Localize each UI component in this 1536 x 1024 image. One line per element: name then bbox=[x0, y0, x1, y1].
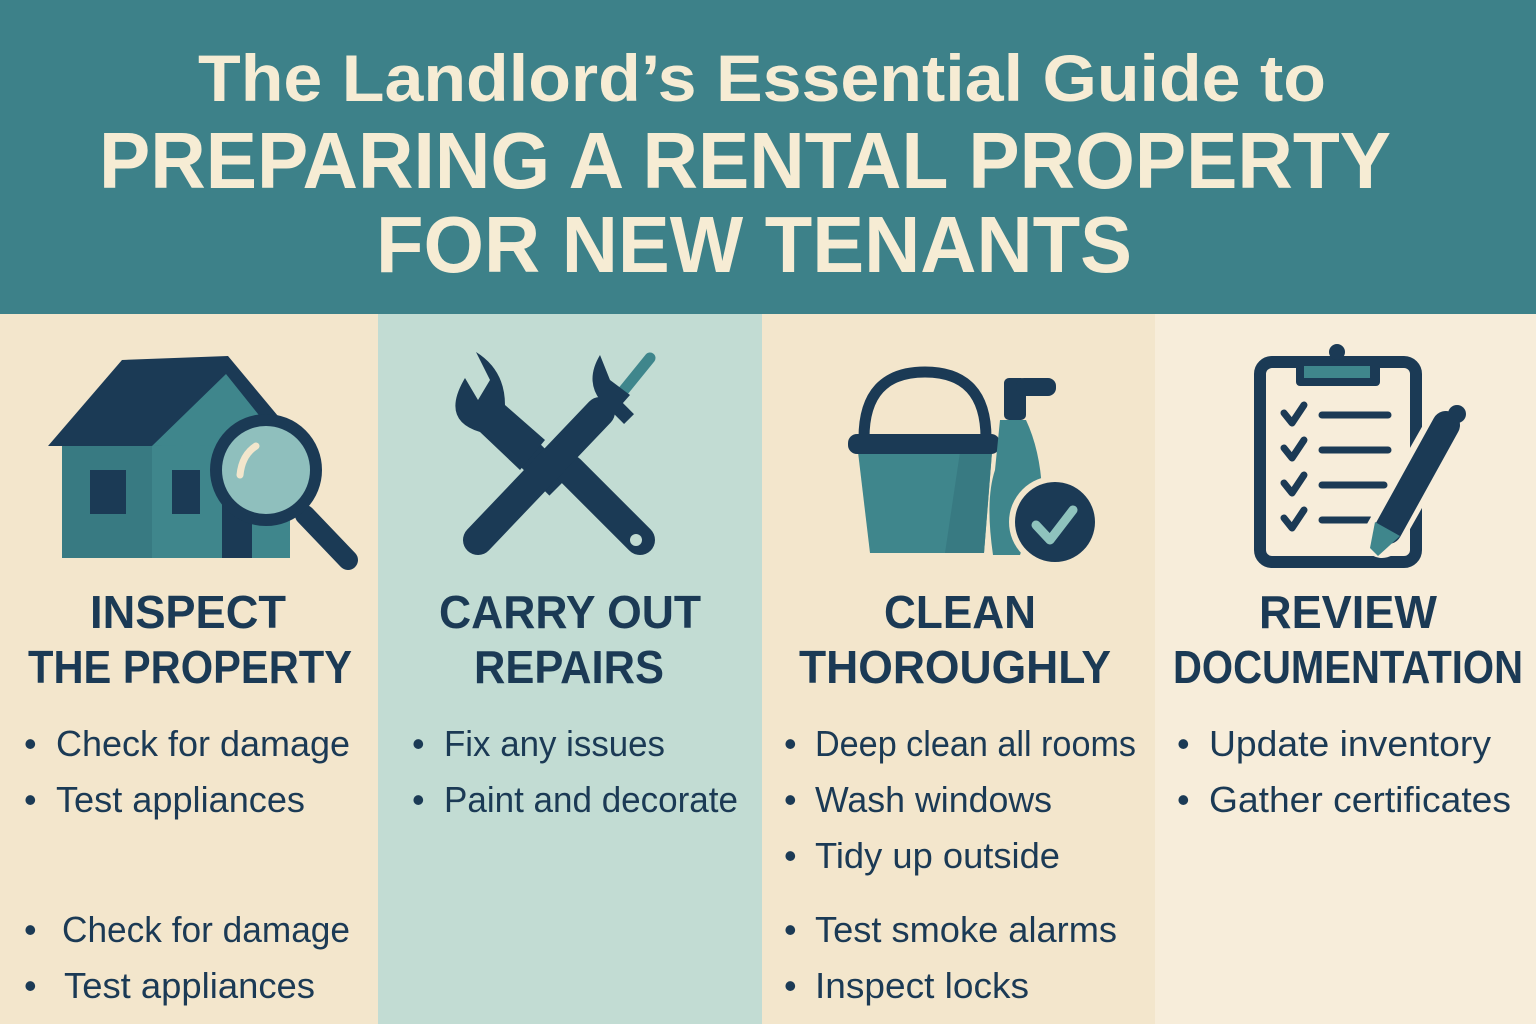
panel: inspect bbox=[0, 314, 378, 1024]
icon: clipboard and pen bbox=[1260, 344, 1466, 562]
bullets: clean: Wash windows bbox=[815, 779, 1052, 820]
heading: documentation: REVIEW bbox=[1259, 586, 1438, 638]
bullets: inspect: Check for damage bbox=[56, 723, 350, 764]
bullets: repairs: • bbox=[412, 779, 425, 820]
bullets: clean: • bbox=[784, 909, 797, 950]
heading: repairs: REPAIRS bbox=[474, 641, 664, 693]
bullets: clean: Tidy up outside bbox=[815, 835, 1060, 876]
icon: bucket and spray bottle bbox=[848, 372, 1101, 568]
title: FOR NEW TENANTS bbox=[376, 200, 1132, 289]
bullets: clean: • bbox=[784, 835, 797, 876]
heading: inspect: INSPECT bbox=[90, 586, 286, 638]
bullets: inspect: Test appliances bbox=[64, 965, 315, 1006]
panel: documentation bbox=[1155, 314, 1536, 1024]
bullets: clean: • bbox=[784, 723, 797, 764]
bullets: inspect: • bbox=[24, 909, 37, 950]
bullets: inspect: • bbox=[24, 965, 37, 1006]
bullets: clean bbox=[784, 723, 1136, 1006]
bullets: documentation: • bbox=[1177, 723, 1190, 764]
icon: wrench and screwdriver bbox=[455, 352, 650, 546]
bullets: documentation: • bbox=[1177, 779, 1190, 820]
heading: repairs: CARRY OUT bbox=[439, 586, 701, 638]
bullets: inspect: Check for damage bbox=[62, 909, 350, 950]
heading: inspect bbox=[28, 586, 352, 693]
bullets: clean: Test smoke alarms bbox=[815, 909, 1117, 950]
bullets: documentation: Update inventory bbox=[1209, 723, 1491, 764]
title: The Landlord’s Essential Guide to bbox=[198, 41, 1326, 115]
heading: clean: THOROUGHLY bbox=[799, 641, 1111, 693]
bullets: clean: Deep clean all rooms bbox=[815, 723, 1136, 764]
bullets: inspect: • bbox=[24, 779, 37, 820]
title: PREPARING A RENTAL PROPERTY bbox=[99, 116, 1391, 205]
bullets: repairs: • bbox=[412, 723, 425, 764]
header band bbox=[0, 0, 1536, 314]
icon: house with magnifier bbox=[48, 356, 348, 560]
panel: repairs bbox=[378, 314, 762, 1024]
bullets: inspect: • bbox=[24, 723, 37, 764]
title bbox=[99, 41, 1391, 289]
bullets: clean: Inspect locks bbox=[815, 965, 1029, 1006]
heading: inspect: THE PROPERTY bbox=[28, 641, 352, 693]
bullets: repairs: Fix any issues bbox=[444, 723, 665, 764]
bullets: inspect bbox=[24, 723, 350, 1006]
bullets: documentation: Gather certificates bbox=[1209, 779, 1511, 820]
bullets: repairs bbox=[412, 723, 738, 820]
bullets: clean: • bbox=[784, 779, 797, 820]
bullets: documentation bbox=[1177, 723, 1511, 820]
heading: documentation bbox=[1173, 586, 1523, 693]
heading: clean: CLEAN bbox=[884, 586, 1036, 638]
bullets: repairs: Paint and decorate bbox=[444, 779, 738, 820]
bullets: inspect: Test appliances bbox=[56, 779, 305, 820]
panel: clean bbox=[762, 314, 1155, 1024]
heading: repairs bbox=[439, 586, 701, 693]
heading: clean bbox=[799, 586, 1111, 693]
bullets: clean: • bbox=[784, 965, 797, 1006]
